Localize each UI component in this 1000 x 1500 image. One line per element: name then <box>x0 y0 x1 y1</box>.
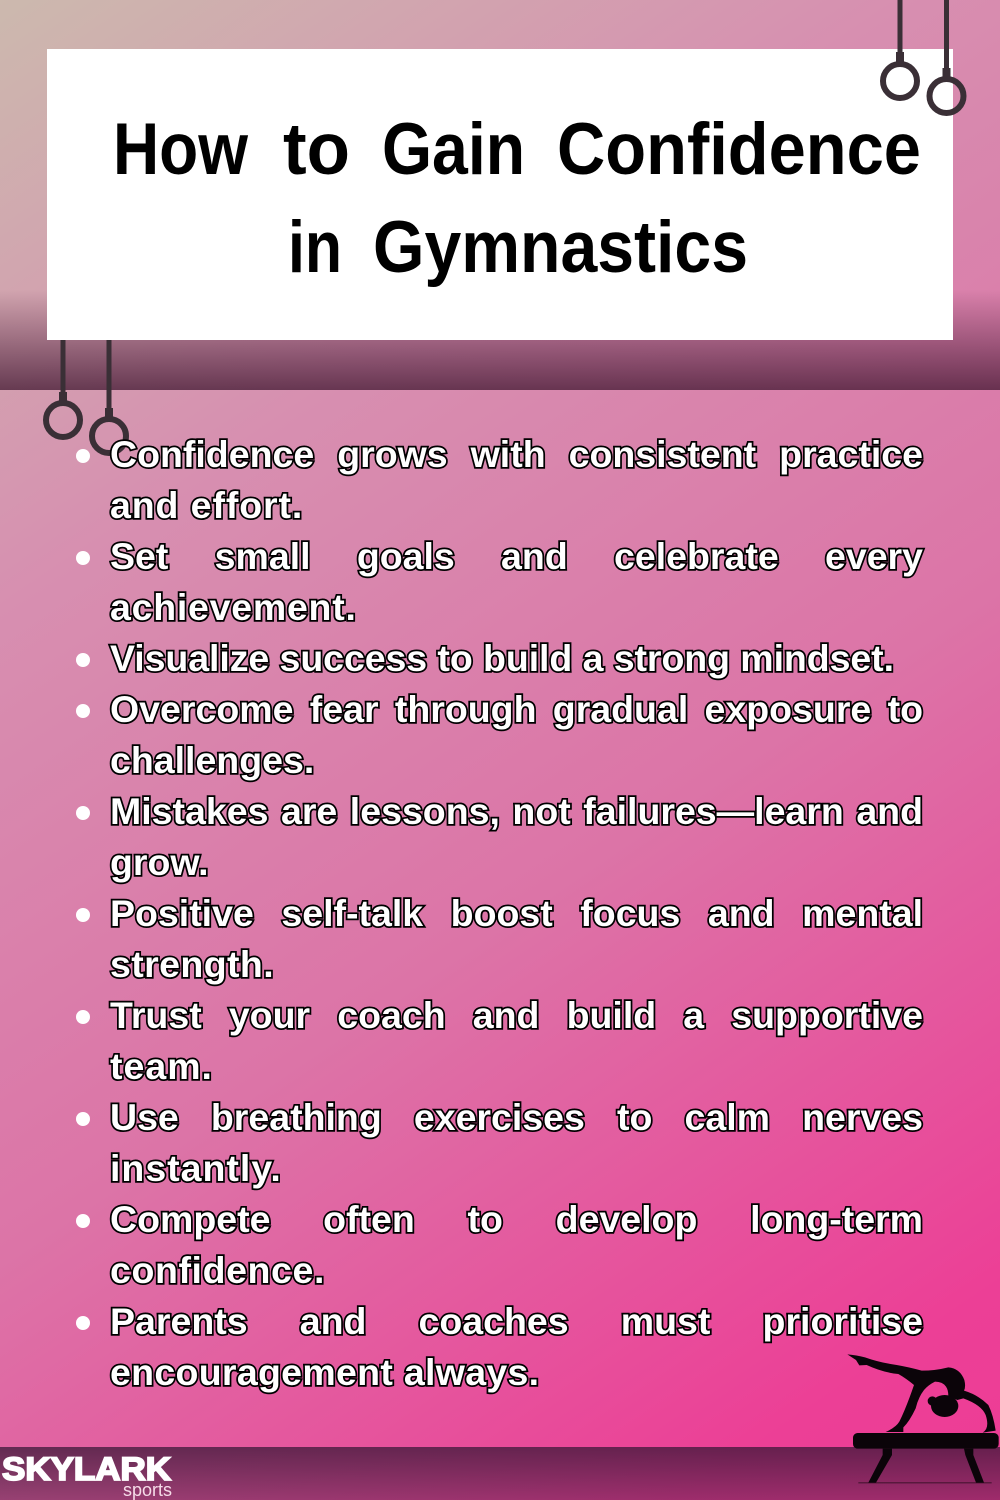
tip 6: Positive self-talk boost focus and mental <box>110 892 923 934</box>
tips list <box>76 433 926 1394</box>
tip 9 <box>76 1198 923 1291</box>
tip 10: encouragement always. <box>110 1351 539 1393</box>
tip 9: confidence. <box>110 1249 325 1291</box>
tip 4: challenges. <box>110 739 314 781</box>
tip 4 <box>76 688 924 782</box>
tip 7 <box>76 994 924 1087</box>
tip 4: Overcome fear through gradual exposure to <box>110 688 923 730</box>
tip 9: Compete often to develop long-term <box>110 1198 923 1240</box>
logo: Skylark sports: SKYLARK <box>2 1451 171 1487</box>
bottom floor band <box>0 1447 1000 1500</box>
logo: Skylark sports <box>2 1451 173 1500</box>
tip 8 <box>76 1096 924 1190</box>
tip 6: strength. <box>110 943 274 985</box>
tip 7: team. <box>110 1045 213 1087</box>
title panel <box>47 49 953 340</box>
tip 2: Set small goals and celebrate every <box>110 535 923 577</box>
title: Confidence <box>557 109 921 190</box>
icon: gymnast silhouette on balance beam <box>848 1354 999 1484</box>
title <box>113 109 921 288</box>
tip 1: Confidence grows with consistent practice <box>110 433 923 475</box>
title: in <box>288 207 342 288</box>
icon: gymnastic rings left <box>46 340 80 437</box>
tip 6 <box>76 892 923 986</box>
tip 1 <box>76 433 924 526</box>
tip 3: Visualize success to build a strong mindset. <box>110 637 894 679</box>
top shadow band <box>0 290 1000 390</box>
tip 2: achievement. <box>110 586 357 628</box>
tip 5: grow. <box>110 841 209 883</box>
tip 5 <box>76 790 923 884</box>
logo: Skylark sports: sports <box>123 1480 172 1500</box>
title: Gymnastics <box>373 207 748 288</box>
tip 10 <box>76 1300 924 1394</box>
title: Gain <box>382 109 525 190</box>
title: How <box>113 109 248 190</box>
tip 7: Trust your coach and build a supportive <box>110 994 923 1036</box>
title: to <box>283 109 350 190</box>
icon: gymnastic rings top right <box>43 0 966 456</box>
tip 1: and effort. <box>110 484 303 526</box>
tip 8: Use breathing exercises to calm nerves <box>110 1096 923 1138</box>
tip 10: Parents and coaches must prioritise <box>110 1300 923 1342</box>
tip 2 <box>76 535 926 628</box>
tip 8: instantly. <box>110 1147 282 1189</box>
tip 5: Mistakes are lessons, not failures—learn and <box>110 790 923 832</box>
